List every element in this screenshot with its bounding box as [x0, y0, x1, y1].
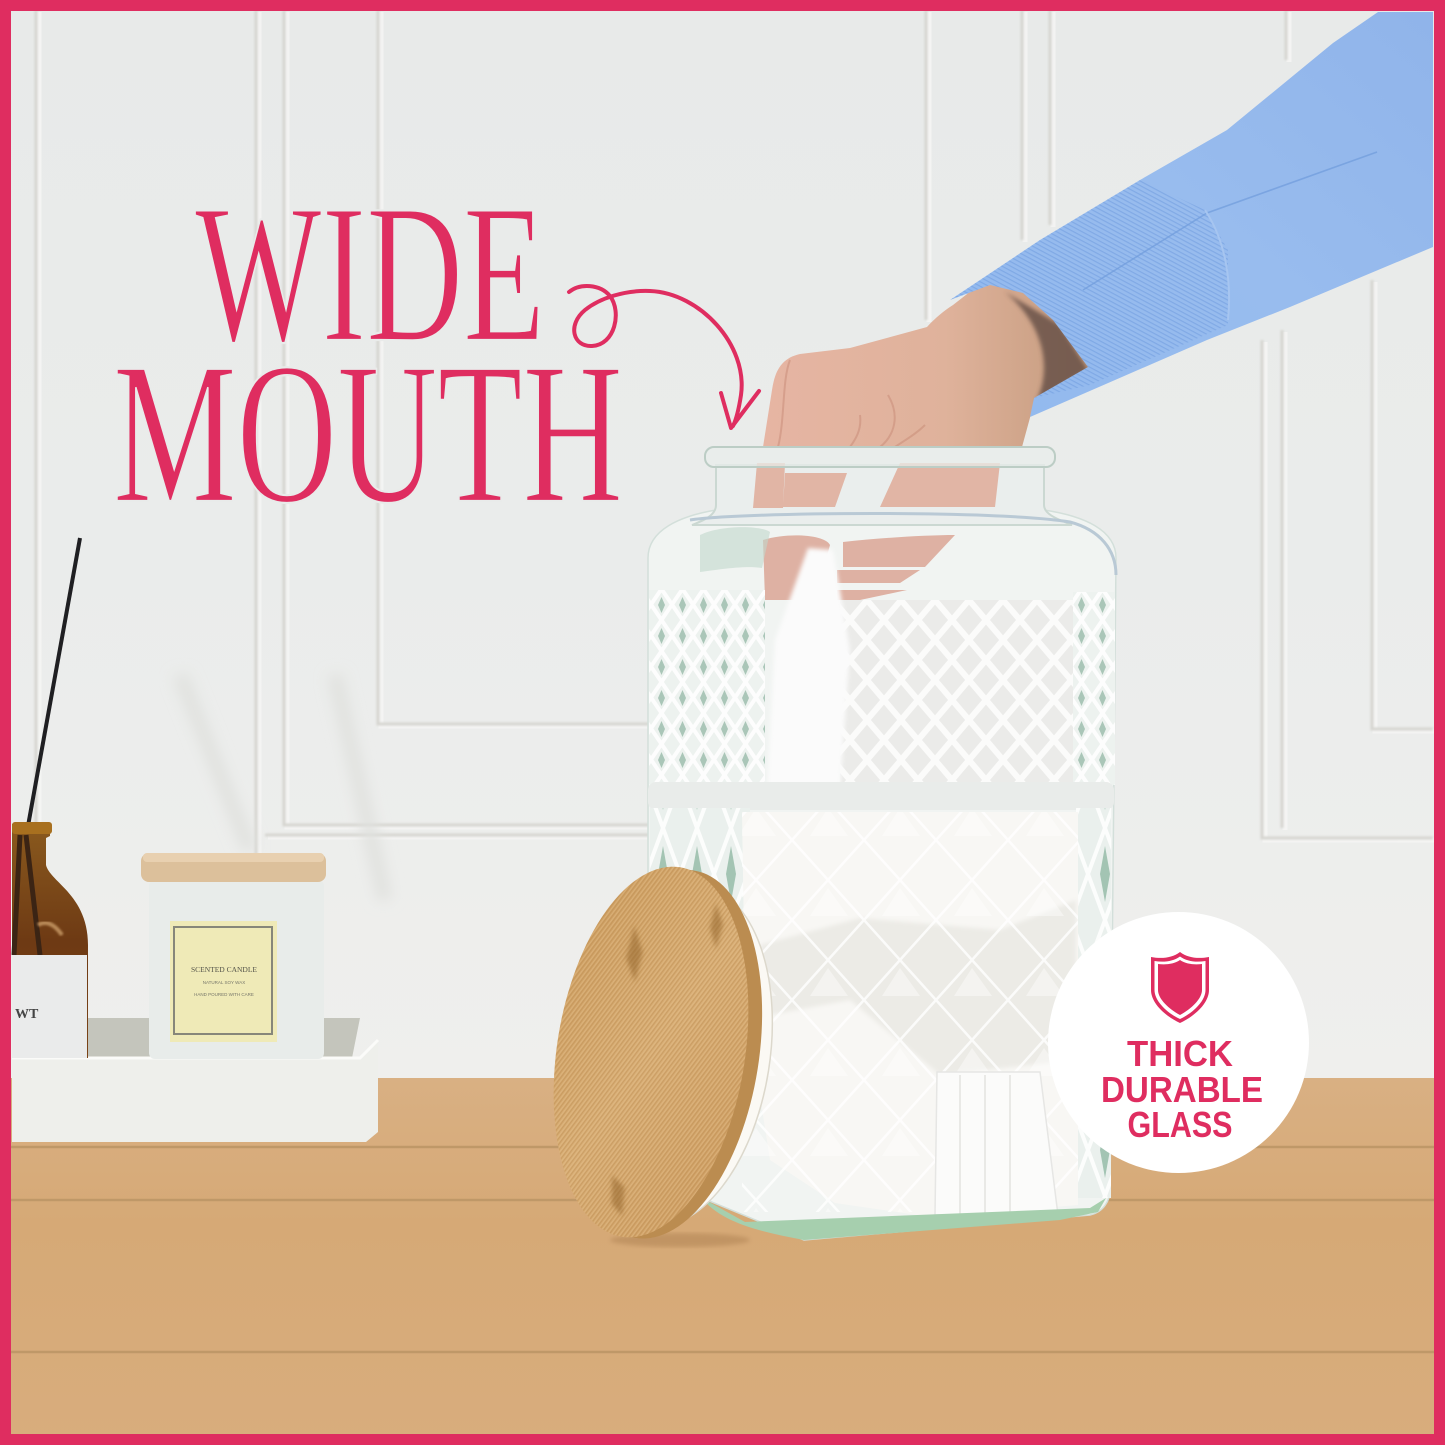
sleeve: [950, 12, 1433, 417]
title: wide mouth: WIDE: [195, 164, 545, 383]
jar body base: [648, 510, 1116, 1240]
hand: [763, 280, 1095, 447]
jar rim: [705, 447, 1055, 467]
jar base: [702, 1198, 1106, 1240]
glass jar: [648, 447, 1116, 1240]
badge: thick durable glass: [1048, 912, 1309, 1173]
candle: [141, 853, 326, 1059]
middle collar: [648, 782, 1114, 810]
badge text: DURABLE: [1101, 1069, 1263, 1110]
badge text: THICK: [1127, 1033, 1233, 1074]
icon: shield: [1151, 952, 1209, 1023]
upper left diamond band: [649, 590, 765, 785]
jar neck: [692, 465, 1072, 525]
lower band: [650, 808, 750, 1108]
bamboo lid: [529, 853, 798, 1255]
badge text: [1101, 1033, 1263, 1145]
fingers seen through glass: [753, 463, 1000, 508]
upper right clear band: [1073, 592, 1115, 785]
title: wide mouth: MOUTH: [113, 321, 623, 545]
candle: SCENTED CANDLE: [191, 965, 257, 974]
wall background: [0, 0, 1445, 1080]
wooden table: [0, 1078, 1445, 1445]
candle: HAND POURED WITH CARE: [194, 992, 254, 997]
reed diffuser: [12, 538, 88, 1058]
reed diffuser: WT: [15, 1007, 39, 1022]
arrow: [569, 286, 759, 428]
candle: NATURAL SOY WAX: [203, 980, 245, 985]
white fill streak: [767, 548, 850, 790]
title: wide mouth: [113, 164, 623, 545]
cotton pad stack: [935, 1072, 1058, 1215]
lid shadow: [610, 1233, 750, 1247]
badge text: GLASS: [1128, 1104, 1232, 1145]
cuff ribbing: [950, 180, 1228, 398]
cotton filling: [742, 812, 1078, 1217]
upper main diamond band: [840, 600, 1075, 785]
tray: [12, 1018, 378, 1142]
shoulder highlights: [690, 514, 1116, 575]
